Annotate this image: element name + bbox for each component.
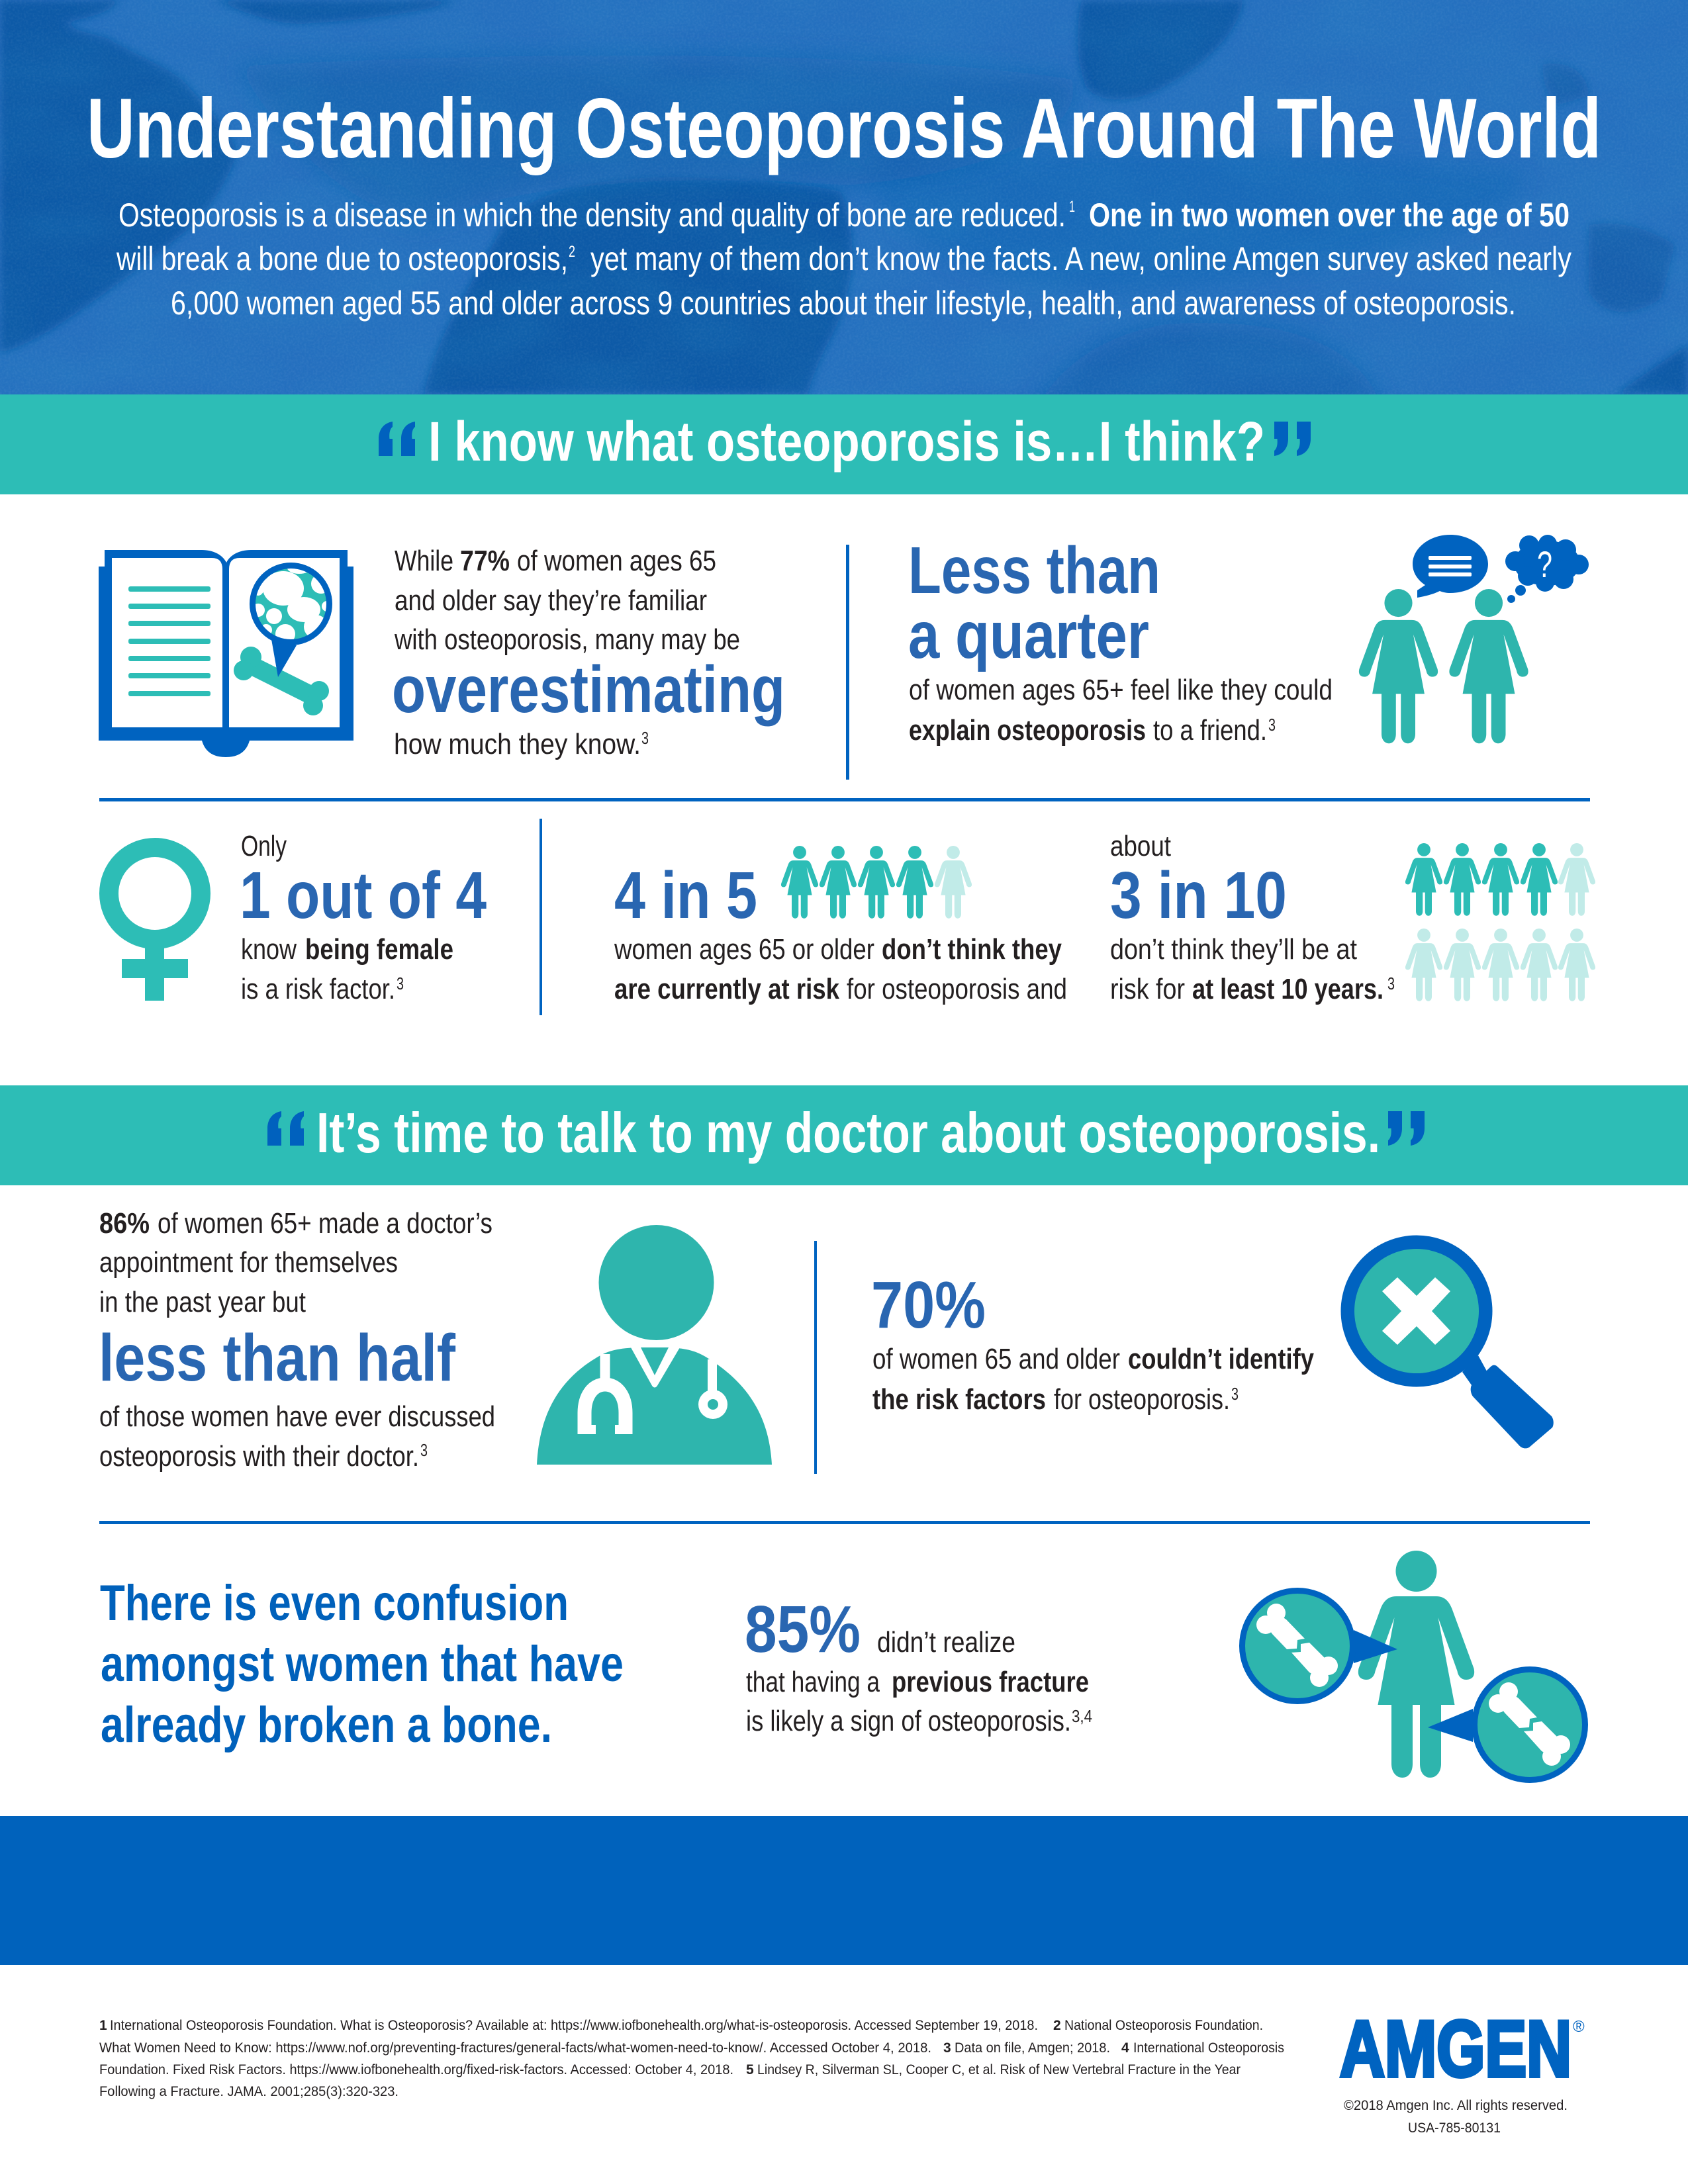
text: 1 out of 4: Only [241,830,287,862]
icon: doctor with stethoscope [537,1225,772,1465]
text: 4 in 5: 4 in 5 [614,858,757,933]
text: 3 in 10: risk for [1110,973,1185,1005]
icon: woman with fractured bones [1242,1551,1585,1780]
text: 85% [745,1592,1092,1737]
text: 70%: the risk factors [872,1383,1046,1416]
intro paragraph: 2 [569,243,575,261]
text: less than a quarter: explain osteoporosis [909,714,1146,747]
heading: confusion amongst women: amongst women that have [101,1636,624,1692]
text: less than half: osteoporosis with their doctor. [99,1440,419,1473]
text: less than a quarter [908,533,1333,747]
intro paragraph [116,197,1571,322]
text: less than a quarter: to a friend. [1153,714,1267,747]
text: 85%: that having a [746,1666,880,1698]
section banner: I know what osteoporosis is [0,394,1688,494]
heading: confusion amongst women: There is even confusion [100,1575,569,1631]
intro paragraph: 1 [1069,198,1075,216]
icon: 3 of 10 women [1405,843,1595,1001]
intro paragraph: Osteoporosis is a disease in which the density and quality of bone are reduced. [118,197,1066,234]
divider [814,1241,817,1474]
text: 3 in 10: don’t think they’ll be at [1110,933,1357,966]
footnotes: Foundation. Fixed Risk Factors. https://www.iofbonehealth.org/fixed-risk-factors. Accessed: October 4, 2018. [99,2062,733,2077]
text: overestimating: and older say they’re familiar [395,584,707,617]
text: overestimating: 77% [460,545,510,577]
text: less than half: of women 65+ made a doctor’s [158,1207,492,1240]
text: overestimating: 3 [641,728,649,748]
text: less than half: appointment for themselves [99,1246,398,1279]
copyright [1344,2098,1568,2136]
text: less than half: of those women have ever discussed [99,1400,495,1433]
footnotes: International Osteoporosis [1133,2040,1284,2056]
footnotes: National Osteoporosis Foundation. [1064,2018,1263,2033]
text: 85%: 3,4 [1072,1706,1092,1726]
text: 85%: is likely a sign of osteoporosis. [746,1705,1071,1737]
text: 85%: 85% [745,1592,861,1666]
heading: confusion amongst women [100,1575,624,1753]
text: 1 out of 4: being female [305,933,453,966]
icon: two women talking and thinking [1359,535,1589,743]
text: less than a quarter: of women ages 65+ feel like they could [909,674,1333,706]
text: overestimating [392,545,785,760]
text: less than a quarter: Less than [908,533,1160,608]
text: 4 in 5: don’t think they [882,933,1062,966]
text: 1 out of 4: 1 out of 4 [240,858,487,933]
footnotes: 2 [1053,2018,1061,2033]
text: 70% [871,1268,1314,1416]
footnotes: 5 [746,2062,754,2077]
footnotes: 1 [99,2018,107,2033]
text: 4 in 5: for osteoporosis and [847,973,1067,1005]
text: less than a quarter: 3 [1268,715,1276,735]
text: 70%: 3 [1231,1384,1239,1404]
text: 3 in 10 [1110,830,1395,1005]
header panel: bone texture background [0,0,1688,410]
divider [846,545,849,780]
divider [539,819,542,1015]
text: 85%: didn’t realize [877,1626,1015,1659]
text: 4 in 5: are currently at risk [614,973,839,1005]
text: less than half: 86% [99,1207,150,1240]
footnotes: Lindsey R, Silverman SL, Cooper C, et al. Risk of New Vertebral Fracture in the Year [757,2062,1241,2077]
text: overestimating: of women ages 65 [517,545,716,577]
section banner: I know what osteoporosis is: I know what osteoporosis is…I think? [428,410,1265,473]
text: 3 in 10: 3 in 10 [1110,858,1287,933]
footnotes: 3 [943,2040,951,2056]
section banner: time to talk to my doctor: It’s time to talk to my doctor about osteoporosis. [316,1102,1380,1165]
text: less than half: 3 [420,1440,428,1460]
icon: female symbol [109,847,201,1001]
text: less than half: in the past year but [99,1286,306,1318]
footnotes: Data on file, Amgen; 2018. [955,2040,1110,2056]
text: 3 in 10: about [1110,830,1171,862]
text: overestimating: overestimating [392,653,785,727]
text: less than half [99,1207,495,1473]
intro paragraph: One in two women over the age of 50 [1089,197,1570,234]
text: 1 out of 4: know [241,933,297,966]
text: 3 in 10: 3 [1387,974,1395,993]
text: 1 out of 4: 3 [397,974,404,993]
footnotes: International Osteoporosis Foundation. What is Osteoporosis? Available at: https://www.iofbonehealth.org/what-is-osteoporosis. Accessed September 19, 2018. [110,2018,1038,2033]
text: 70%: couldn’t identify [1128,1343,1314,1375]
text: less than half: less than half [99,1321,456,1395]
footnotes [99,2018,1284,2099]
text: 70%: for osteoporosis. [1054,1383,1230,1416]
intro paragraph: will break a bone due to osteoporosis, [116,240,568,277]
section banner: time to talk to my doctor [0,1085,1688,1185]
icon: magnifying glass with X [1341,1235,1554,1448]
text: 4 in 5 [614,858,1067,1005]
text: 85%: previous fracture [892,1666,1089,1698]
icon: two women talking and thinking: ? [1537,543,1552,585]
divider [99,1521,1590,1524]
copyright: USA-785-80131 [1408,2120,1501,2136]
copyright: ©2018 Amgen Inc. All rights reserved. [1344,2098,1568,2113]
text: overestimating: with osteoporosis, many may be [394,623,740,656]
icon: 4 of 5 women [781,846,972,919]
footnotes: What Women Need to Know: https://www.nof.org/preventing-fractures/general-facts/what-women-need-to-know/. Accessed October 4, 2018. [99,2040,931,2056]
text: 1 out of 4: is a risk factor. [241,973,395,1005]
text: 3 in 10: at least 10 years. [1192,973,1383,1005]
footnotes: Following a Fracture. JAMA. 2001;285(3):320-323. [99,2084,399,2099]
text: 70%: of women 65 and older [872,1343,1120,1375]
icon: open book with bone [99,550,353,757]
heading: confusion amongst women: already broken a bone. [101,1697,552,1753]
text: less than a quarter: a quarter [908,598,1149,672]
footnotes: 4 [1121,2040,1129,2056]
text: 1 out of 4 [240,830,487,1005]
logo: Amgen: AMGEN [1340,2005,1571,2093]
text: 4 in 5: women ages 65 or older [614,933,874,966]
divider [99,798,1590,801]
text: 70%: 70% [871,1268,986,1342]
logo: Amgen: ® [1573,2018,1585,2036]
text: overestimating: While [395,545,453,577]
footer color bar [0,1816,1688,1965]
text: overestimating: how much they know. [394,728,641,760]
